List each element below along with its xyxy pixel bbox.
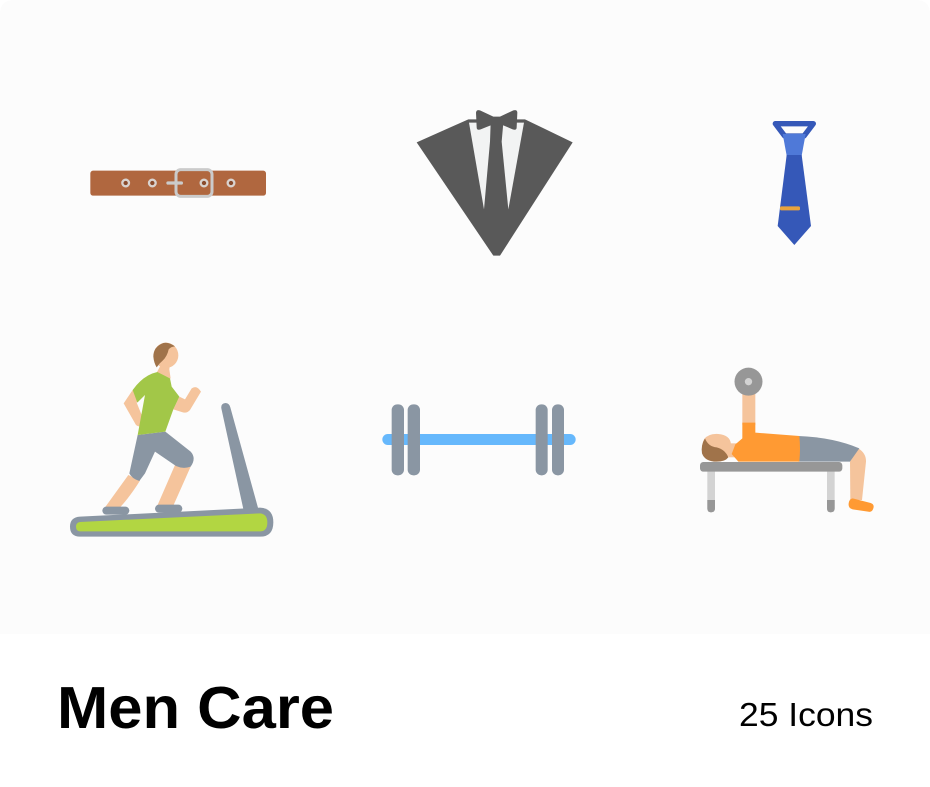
icon: necktie xyxy=(775,124,813,245)
treadmill base xyxy=(70,508,273,537)
bench top xyxy=(700,462,842,472)
hair xyxy=(153,343,175,367)
bow tie xyxy=(476,110,517,130)
treadmill belt xyxy=(76,513,267,531)
hair xyxy=(702,438,728,462)
bench legs xyxy=(707,470,835,512)
tie clip xyxy=(780,206,800,210)
belt strap xyxy=(90,171,266,196)
weight plates xyxy=(392,404,564,475)
shirt left xyxy=(469,123,491,209)
shorts xyxy=(798,436,859,462)
runner arms xyxy=(124,387,201,427)
shoes xyxy=(102,505,182,515)
belt holes xyxy=(122,180,234,186)
icon: belt xyxy=(90,170,266,196)
shirt right xyxy=(502,123,524,209)
tie loop xyxy=(775,124,813,136)
icon: tuxedo xyxy=(417,110,573,256)
neck xyxy=(728,443,738,457)
belt buckle xyxy=(168,170,212,196)
icon: treadmill runner xyxy=(70,343,273,537)
treadmill post xyxy=(221,403,258,509)
bar xyxy=(382,434,576,445)
arm xyxy=(742,393,755,425)
jacket xyxy=(417,119,573,256)
lower leg xyxy=(850,448,866,500)
runner legs xyxy=(105,465,191,507)
weight hub xyxy=(745,378,752,385)
tie knot xyxy=(783,134,806,156)
shirt xyxy=(732,423,800,462)
title: Men Care xyxy=(57,675,334,741)
bench feet xyxy=(707,500,835,512)
head xyxy=(154,343,178,368)
shirt xyxy=(133,372,179,435)
head xyxy=(702,434,731,461)
weight xyxy=(734,368,762,396)
icon: bench press xyxy=(700,368,874,512)
neck xyxy=(157,363,171,379)
foot xyxy=(849,498,874,512)
tie body xyxy=(778,155,811,245)
icon: barbell xyxy=(382,404,576,475)
icon count: 25 Icons xyxy=(739,696,873,733)
shorts xyxy=(129,432,194,481)
